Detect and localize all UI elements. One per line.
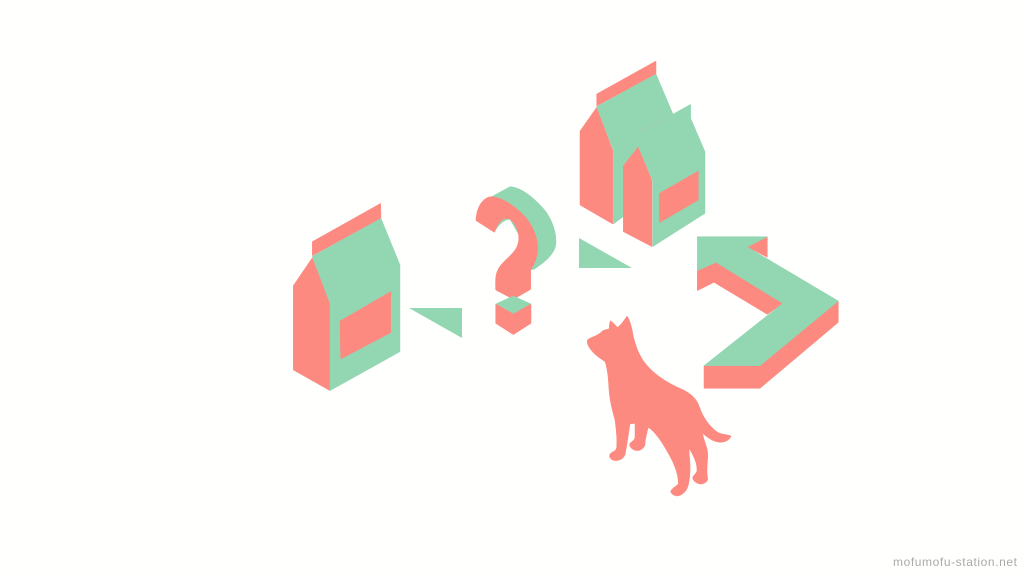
triangle: centre <box>579 238 632 268</box>
dog silhouette <box>587 316 731 496</box>
food bags: pair at top <box>580 61 705 247</box>
back bag <box>580 61 674 224</box>
watermark: mofumofu-station.net <box>893 555 1018 569</box>
question mark dot <box>496 296 531 335</box>
triangle: left <box>409 308 462 338</box>
chevron arrow <box>697 237 838 388</box>
front bag <box>623 104 705 247</box>
food bag: left <box>293 203 400 391</box>
question mark <box>476 187 556 335</box>
